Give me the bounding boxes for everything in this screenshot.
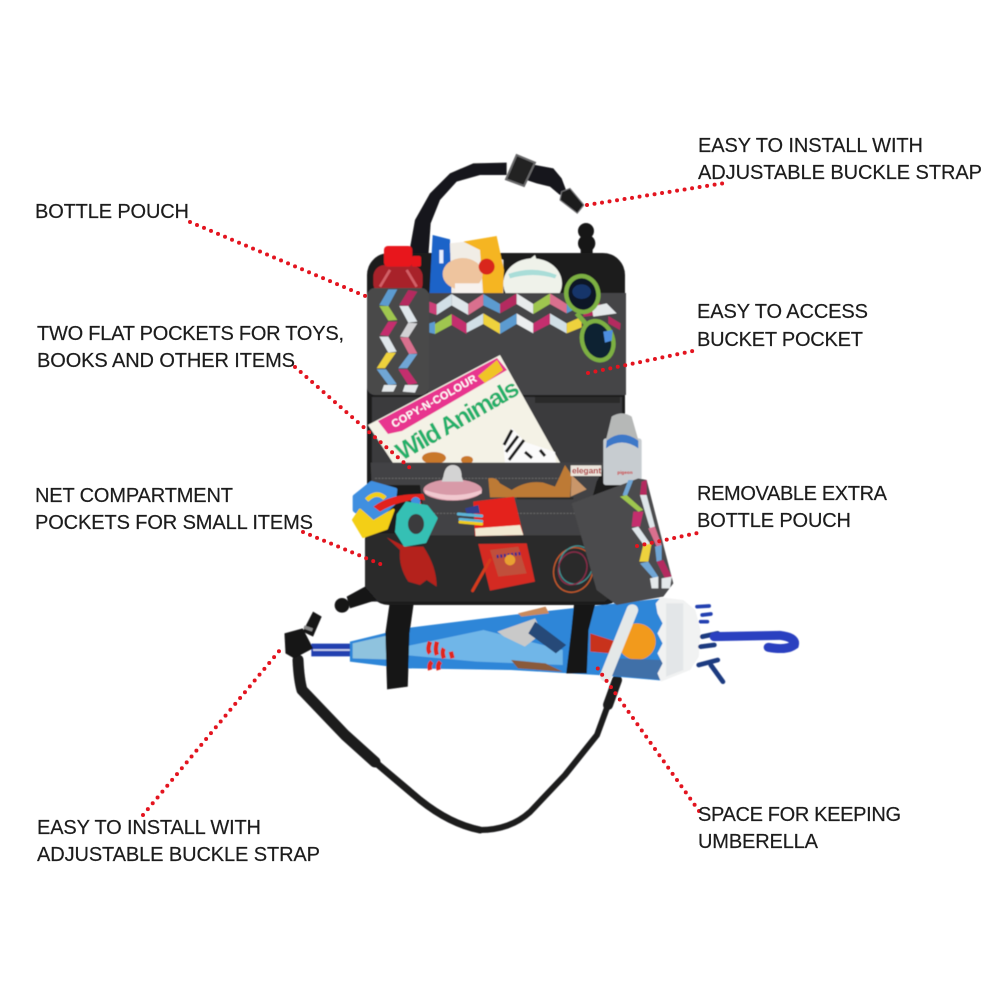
icon: elegant label: elegant (572, 465, 601, 475)
icon: zebra (503, 428, 556, 463)
icon: wipes pack (429, 235, 504, 297)
icon: colouring book Wild Animals: COPY-N-COLOUR (390, 373, 479, 431)
arrow: removable pouch (637, 532, 702, 546)
label: bottom buckle strap: EASY TO INSTALL WITH (37, 817, 261, 839)
panel: flat pocket (372, 397, 622, 467)
icon: umbrella (311, 597, 794, 682)
panel: middle zip pocket (371, 463, 607, 535)
label: flat pockets (37, 323, 344, 372)
icon: red bottle (373, 246, 423, 295)
icon: teether soother (423, 465, 482, 501)
icon: colouring book Wild Animals: Wild Animals (391, 374, 524, 466)
zigzag embroidery: removable pouch left column (620, 480, 658, 588)
icon: buckle (284, 612, 322, 658)
icon: bead necklace (547, 541, 599, 598)
zigzag embroidery: bottle pouch right column (398, 290, 418, 393)
icon: green sunglasses (563, 273, 618, 364)
label: bucket pocket: EASY TO ACCESS (697, 301, 868, 323)
zigzag embroidery: removable pouch right column (640, 480, 672, 588)
panel: bucket pocket (428, 293, 626, 395)
arrow: flat pockets (295, 367, 410, 468)
label: net compartment: POCKETS FOR SMALL ITEMS (35, 512, 313, 534)
label: bucket pocket (697, 301, 868, 351)
icon: baby feeding bottle: pigeon (617, 470, 633, 475)
icon: baby feeding bottle (603, 413, 642, 485)
icon: umbrella holder straps (385, 597, 597, 689)
arrow: umbrella space (596, 666, 699, 811)
label: umbrella space (698, 804, 901, 853)
label: net compartment: NET COMPARTMENT (35, 485, 233, 507)
icon: red toy animal (387, 537, 437, 587)
icon: crayons box lower (473, 543, 535, 591)
organizer back panel (367, 253, 625, 605)
panel: removable bottle pouch (572, 478, 673, 605)
label: removable pouch: BOTTLE POUCH (697, 510, 851, 532)
arrow: bottle pouch (190, 222, 370, 298)
zigzag embroidery: bucket pocket row two (429, 313, 621, 334)
icon: top strap with buckle (409, 155, 584, 257)
label: removable pouch: REMOVABLE EXTRA (697, 483, 888, 505)
panel: net compartment pockets (365, 533, 608, 602)
icon: lower knob (335, 587, 377, 613)
arrow: net compartment (303, 532, 385, 566)
dotted leader lines (143, 183, 725, 815)
organizer upper section (409, 155, 595, 257)
zigzag embroidery: bottle pouch left column (377, 289, 397, 392)
label: bottom buckle strap: ADJUSTABLE BUCKLE STRAP (37, 844, 320, 866)
label: removable pouch (697, 483, 888, 532)
label: net compartment (35, 485, 313, 534)
label: umbrella space: UMBERELLA (698, 831, 819, 853)
label: flat pockets: TWO FLAT POCKETS FOR TOYS, (37, 323, 344, 345)
label: top buckle strap: EASY TO INSTALL WITH (698, 135, 923, 157)
label: top buckle strap: ADJUSTABLE BUCKLE STRAP (698, 162, 982, 184)
product illustration: car seat organizer (284, 155, 794, 830)
zigzag embroidery: bucket pocket row one (429, 293, 617, 317)
label: top buckle strap (698, 135, 982, 184)
label: bucket pocket: BUCKET POCKET (697, 329, 863, 351)
icon: colouring book Wild Animals (368, 355, 562, 466)
label: bottom buckle strap (37, 817, 320, 866)
icon: adjustable lower strap (298, 660, 617, 830)
label: flat pockets: BOOKS AND OTHER ITEMS (37, 350, 295, 372)
label: bottle pouch: BOTTLE POUCH (35, 201, 189, 223)
label: umbrella space: SPACE FOR KEEPING (698, 804, 901, 826)
panel: bottle pouch (367, 288, 429, 395)
icon: crayons box upper (458, 497, 523, 536)
icon: cream tub (503, 255, 562, 308)
arrow: top buckle strap (587, 183, 725, 205)
panel: removable pouch and net area (335, 413, 673, 613)
arrow: bucket pocket (588, 351, 693, 373)
icon: headrest knob (578, 223, 595, 257)
icon: rattle toy (353, 483, 436, 545)
icon: plush toy (488, 465, 587, 497)
arrow: bottom buckle strap (143, 650, 280, 815)
lower strap and umbrella (284, 597, 794, 689)
